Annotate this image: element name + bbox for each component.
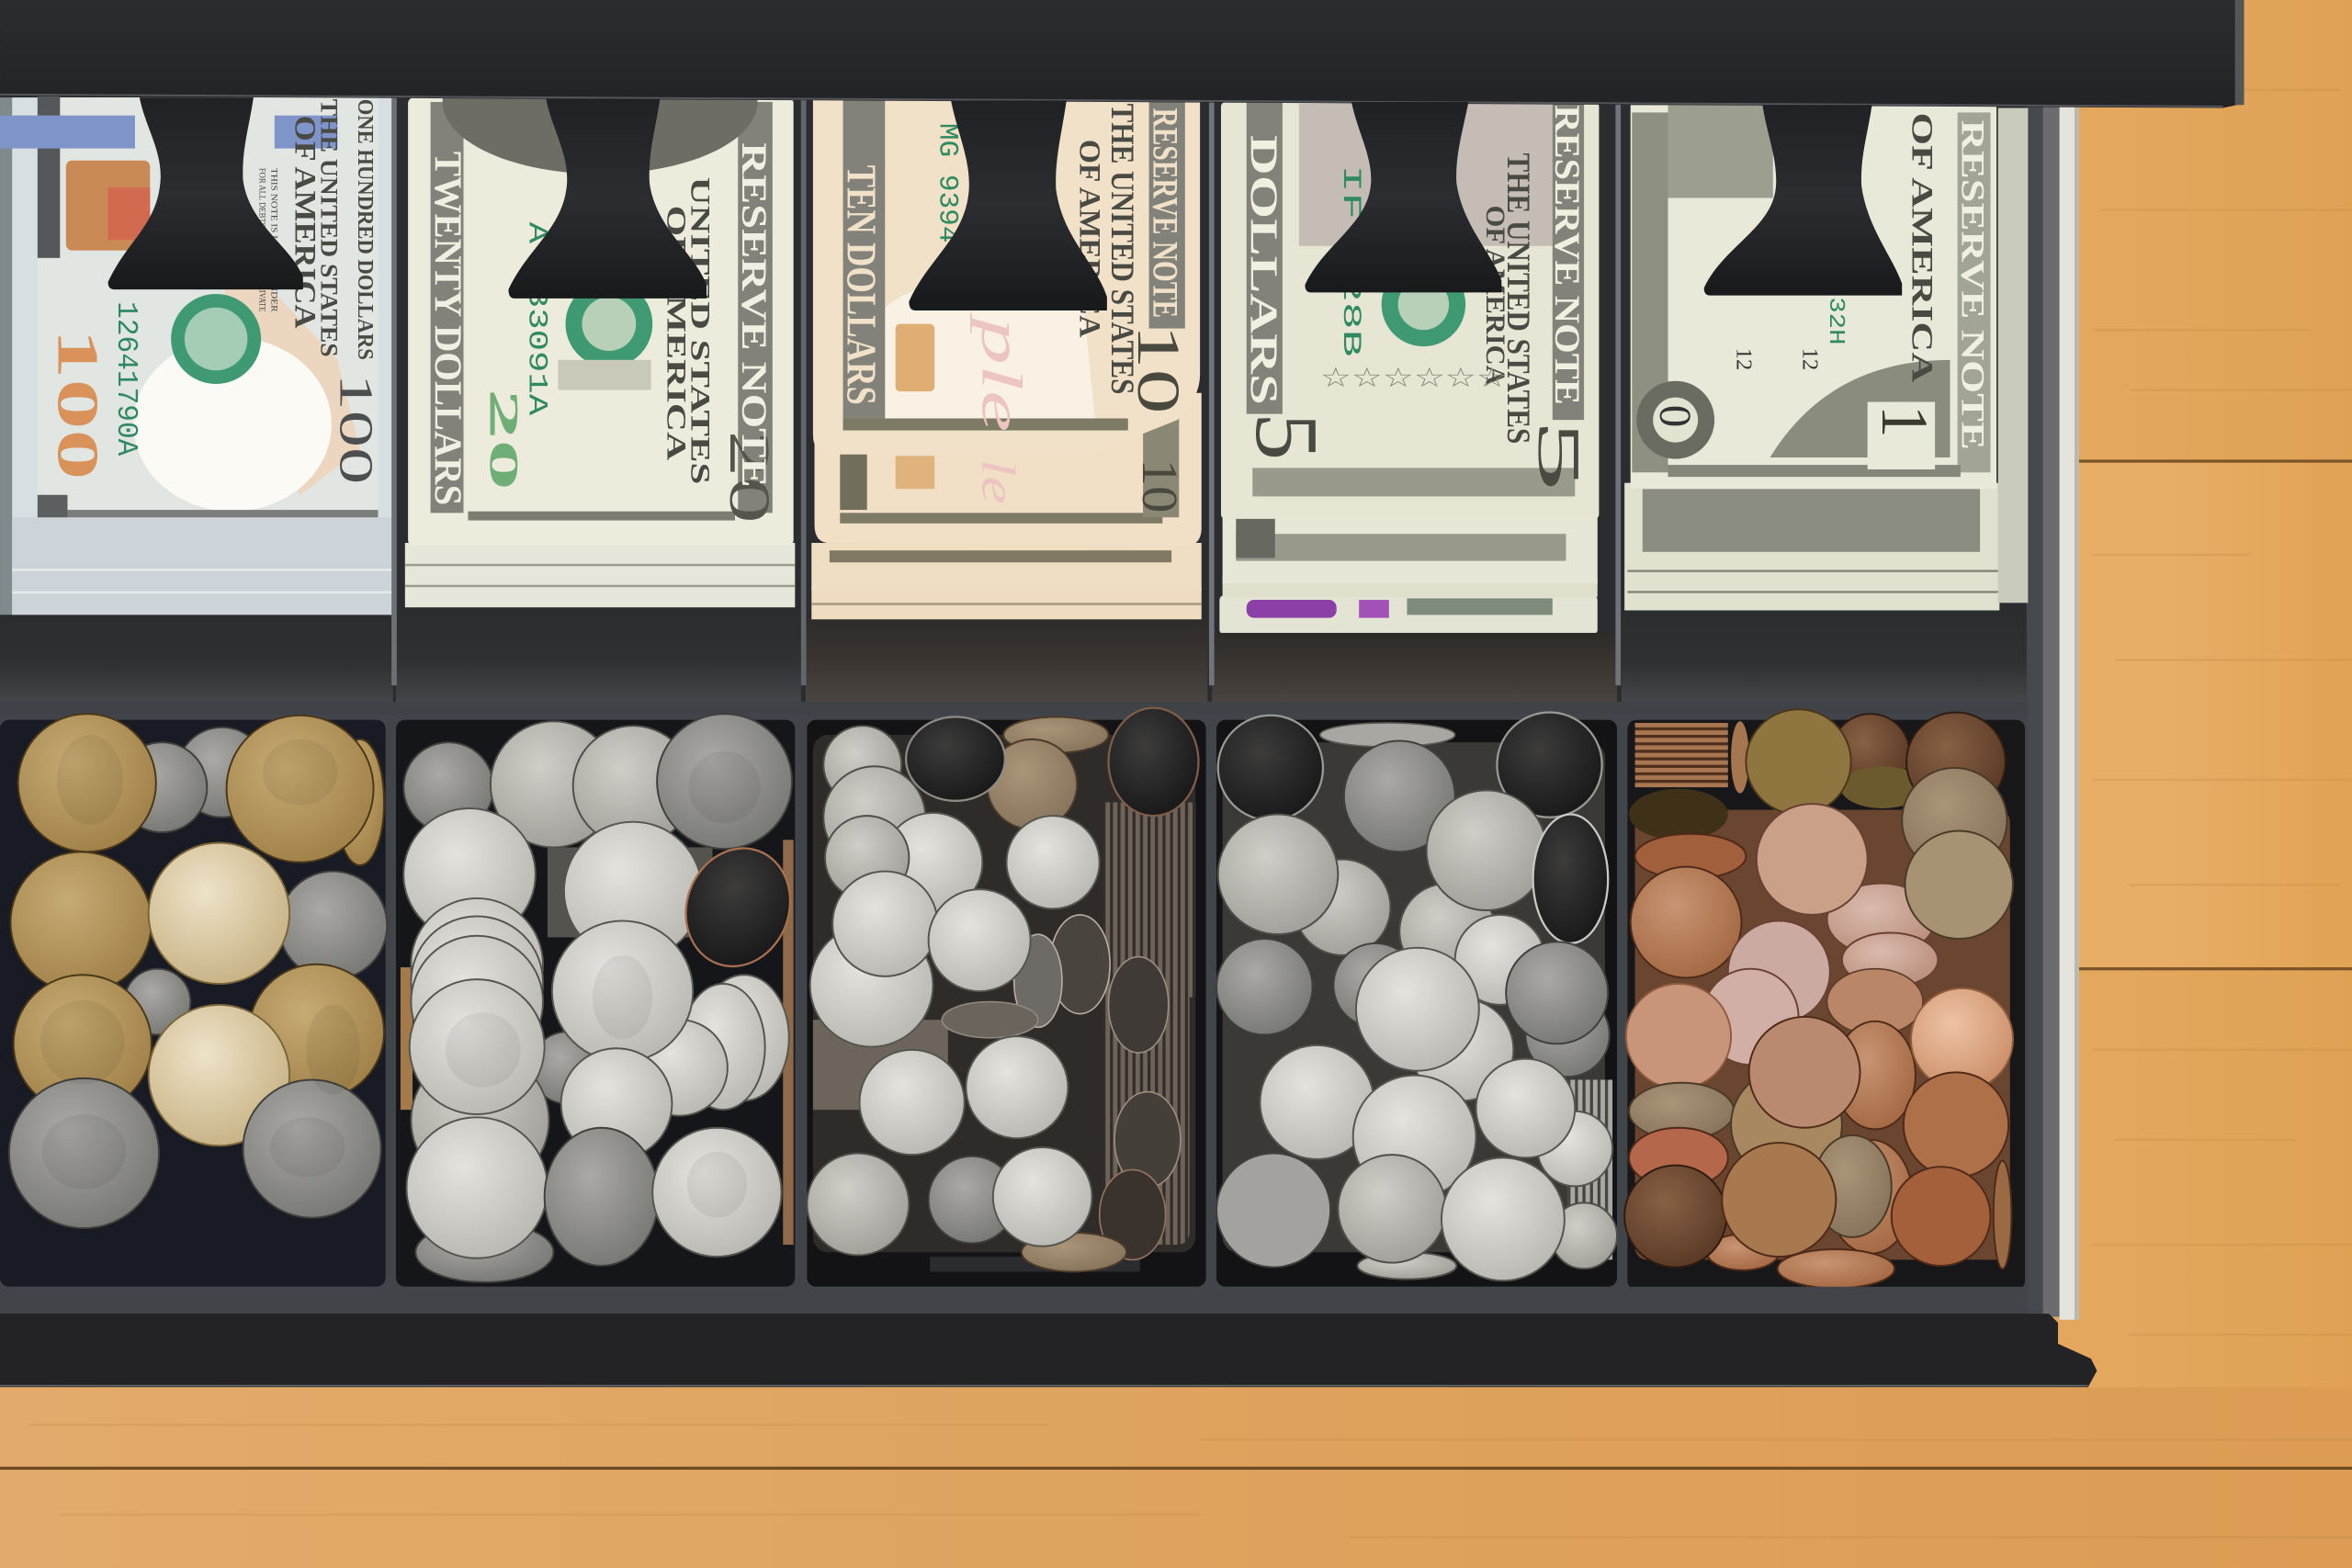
bill: twenty dollars: RESERVE NOTE [734,142,774,488]
bill: one dollar [1624,105,2028,612]
bill: five dollars: ☆☆☆☆☆☆ [1320,364,1508,393]
bill: one dollar: 12 [1797,348,1822,370]
bill: ten dollars: le [971,459,1024,504]
bill: twenty dollars: TWENTY DOLLARS [425,152,469,505]
drawer tray [0,90,2079,1327]
bill: one dollar: 0 [1650,405,1701,427]
bill: twenty dollars: 20 [481,389,526,491]
bill: twenty dollars: A 933091A [521,222,551,416]
bill: five dollars: RESERVE NOTE [1547,105,1587,405]
bill: ten dollars: OF AMERICA [1073,140,1106,338]
front drawer lip [0,1287,2097,1387]
bill: one dollar: 12 [1732,348,1757,370]
bill: one dollar: 1 [1868,405,1941,438]
coins: pennies [1624,709,2013,1288]
bill: hundred dollars: 100 [46,329,111,479]
coin compartments [0,714,2028,1314]
bill: ten dollars: TEN DOLLARS [838,165,885,405]
bill compartment shelf [0,97,2028,716]
bill: ten dollars: ple [969,312,1032,432]
bill: five dollars: 5 [1237,412,1336,460]
bill: one dollar: 32H [1823,297,1848,345]
bill: hundred dollars: ONE HUNDRED DOLLARS [353,99,378,360]
bill: ten dollars: 10 [1125,324,1191,414]
bill: five dollars: THE UNITED STATES [1500,153,1537,444]
coins: dollar coins [9,714,387,1228]
bill: five dollars: 5 [1525,419,1591,492]
bill: twenty dollars: OF AMERICA [662,206,691,460]
bill: ten dollars: RESERVE NOTE [1146,108,1185,318]
bill: one dollar: RESERVE NOTE [1954,120,1991,450]
bill: hundred dollars: OF AMERICA [288,116,322,329]
bill: hundred dollars: THE UNITED STATES [315,99,342,357]
top drawer cover [0,0,2244,108]
coins: dimes [807,708,1198,1271]
bill: ten dollars [811,97,1202,621]
bill: twenty dollars [405,30,795,609]
bill: hundred dollars: 100 [330,374,383,484]
bill: five dollars: IF 128B [1336,165,1364,357]
bill: twenty dollars: UNITED STATES [685,177,715,484]
bill: five dollars: DOLLARS [1242,135,1285,405]
bill: five dollars [1219,102,1599,635]
bill: five dollars: OF AMERICA [1480,206,1510,386]
bill: ten dollars: 10 [1131,459,1187,513]
bill: hundred dollars: FOR ALL DEBTS, PUBLIC AND PRIVATE [256,168,266,312]
coins: quarters [401,714,807,1282]
coins: nickels [1216,713,1617,1280]
bill: hundred dollars: 12641790A [109,301,141,457]
bill: one dollar: L835 [1811,165,1836,225]
bill: hundred dollars: THIS NOTE IS LEGAL TENDER [269,168,279,312]
bill: twenty dollars: 20 [718,431,780,524]
bill clips [108,97,1902,310]
bill: ten dollars: MG 9394 [933,123,963,243]
bill: ten dollars: THE UNITED STATES [1104,104,1141,394]
bill: hundred dollars [0,95,393,615]
bill: one dollar: OF AMERICA [1905,112,1939,383]
